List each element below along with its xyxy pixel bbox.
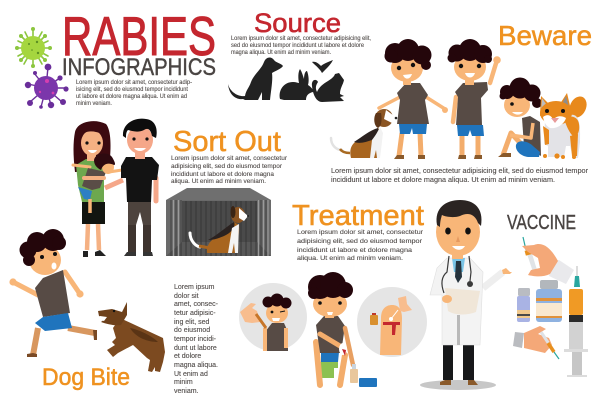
heading: Dog Bite: Dog Bite — [42, 364, 130, 391]
text block: sort out: Lorem ipsum dolor sit amet, consectetur — [171, 155, 288, 162]
illustration: dog in cage — [166, 188, 271, 256]
text block: source: Lorem ipsum dolor sit amet, consectetur adipisicing elit, — [231, 35, 371, 42]
text block: dog bite: dolor sit — [174, 293, 199, 300]
silhouette: rabbit — [280, 69, 313, 100]
text block: treatment: incididunt ut labore et dolore magna — [297, 247, 412, 254]
child held — [73, 153, 122, 213]
text block: dog bite: tempor incidi- — [174, 336, 217, 343]
text block: dog bite: et dolore — [174, 353, 201, 360]
large bottle — [536, 280, 562, 322]
icon: green virus — [15, 27, 52, 68]
heading: Sort Out: Sort Out — [173, 126, 281, 158]
text block: treatment: aliqua. Ut enim ad minim veniam. — [297, 255, 403, 262]
illustration: angry dog — [98, 302, 165, 372]
text block: dog bite: Ut enim ad — [174, 371, 208, 378]
boy 1 — [379, 39, 448, 159]
text block: sort out: incididunt ut labore et dolore magna — [171, 171, 274, 178]
corgi — [540, 93, 590, 159]
man — [121, 119, 159, 256]
small vial — [517, 288, 530, 322]
text block: intro: ut labore et dolore magna aliqua. Ut enim ad — [76, 93, 187, 100]
doctor shadow — [420, 380, 496, 390]
text block: source — [231, 35, 371, 56]
heading: Treatment: Treatment — [292, 200, 424, 232]
upper hand with syringe — [522, 237, 574, 284]
text block: intro: minim veniam. — [76, 100, 112, 107]
text block: dog bite: magna aliqua. — [174, 362, 218, 369]
cage bars — [171, 200, 266, 256]
text block: dog bite — [174, 284, 219, 395]
woman — [74, 121, 123, 257]
illustration: boy waving — [448, 39, 501, 159]
icon: beagle — [331, 109, 397, 158]
text block: source: magna aliqua. Ut enim ad minim veniam. — [231, 49, 331, 56]
text block: sort out — [171, 155, 288, 185]
illustration: injection circle — [239, 283, 307, 351]
silhouette: bat — [312, 60, 333, 73]
text block: dog bite: do eiusmod — [174, 327, 210, 334]
illustration: boy petting beagle — [331, 39, 448, 159]
icon: purple virus — [25, 64, 69, 109]
text block: dog bite: amet, consec- — [174, 301, 219, 308]
text block: dog bite: Lorem ipsum — [174, 284, 215, 291]
text block: dog bite: ing elit, sed — [174, 319, 210, 326]
title: RABIES: RABIES — [62, 5, 216, 67]
text block: intro — [76, 79, 192, 107]
text block: intro: isicing elit, sed do eiusmod tempor incididunt — [76, 86, 188, 93]
heading: Source: Source — [254, 8, 341, 38]
subtitle: INFOGRAPHICS: INFOGRAPHICS — [62, 54, 216, 81]
text block: source: sed do eiusmod tempor incididunt ut labore et dolore — [231, 42, 364, 49]
text block: treatment: Lorem ipsum dolor sit amet, consectetur — [297, 229, 424, 236]
icon: animal silhouettes — [228, 58, 344, 102]
illustration: wound circle — [357, 287, 427, 357]
illustration: vaccine set — [513, 237, 588, 377]
lower hand with syringe — [513, 326, 559, 359]
text block: treatment — [297, 229, 424, 262]
text block: sort out: adipisicing elit, sed do eiusmod tempor — [171, 163, 283, 170]
beagle in cage — [190, 206, 249, 253]
illustration: running boy — [9, 229, 97, 357]
illustration: family — [73, 119, 159, 257]
text block: dog bite: veniam. — [174, 388, 199, 395]
text block: intro: Lorem ipsum dolor sit amet, consectetur adip- — [76, 79, 192, 86]
text block: dog bite: tetur adipisic- — [174, 310, 216, 317]
text block: sort out: aliqua. Ut enim ad minim veniam. — [171, 178, 266, 185]
text block: dog bite: minim — [174, 379, 193, 386]
silhouette: cat — [312, 73, 344, 102]
label: VACCINE: VACCINE — [507, 212, 576, 234]
text block: beware: incididunt ut labore et dolore magna aliqua. Ut enim ad minim veniam. — [331, 175, 555, 184]
illustration: seated boy with wound — [308, 272, 377, 387]
text block: beware — [331, 166, 589, 184]
text block: treatment: adipisicing elit, sed do eiusmod tempor — [297, 238, 423, 245]
sitting boy — [498, 78, 542, 157]
text block: dog bite: dunt ut labore — [174, 345, 217, 352]
silhouette: dog — [228, 58, 283, 100]
illustration: sitting boy with corgi — [498, 78, 590, 159]
text block: beware: Lorem ipsum dolor sit amet, consectetur adipisicing elit, sed do eiusmod tempor — [331, 166, 589, 175]
illustration: doctor — [420, 200, 512, 390]
large syringe — [564, 266, 588, 377]
heading: Beware: Beware — [498, 20, 592, 51]
